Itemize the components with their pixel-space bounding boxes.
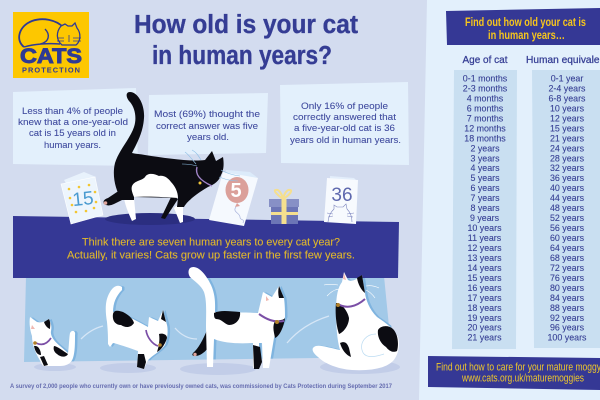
text block: only 16%: years old in human years. (290, 135, 401, 146)
heading banner: find out: in human years… (488, 29, 565, 42)
heading banner: find out (446, 8, 600, 45)
column: human equivalent: 28 years (550, 153, 585, 163)
card: 36 (324, 176, 358, 224)
column: human equivalent: 96 years (550, 323, 585, 333)
column: age of cat: 7 months (467, 113, 504, 123)
column: human equivalent: 24 years (550, 143, 585, 153)
column: human equivalent (526, 55, 600, 348)
column: human equivalent: 6-8 years (548, 93, 586, 103)
column: human equivalent: 56 years (550, 223, 585, 233)
column: human equivalent: 52 years (550, 213, 585, 223)
column: age of cat (452, 55, 517, 349)
text block: most 69%: years old. (187, 132, 229, 143)
column: age of cat: 10 years (467, 223, 502, 233)
column: age of cat: 16 years (467, 283, 502, 293)
kitten (30, 317, 78, 371)
logo: Cats Protection: PROTECTION (22, 66, 80, 74)
column: human equivalent: 10 years (550, 103, 585, 113)
column: age of cat: 13 years (467, 253, 502, 263)
text block: most 69%: Most (69%) thought the (154, 109, 260, 120)
column: human equivalent: 21 years (550, 133, 585, 143)
column: human equivalent: 32 years (550, 163, 585, 173)
text block: less than 4%: cat is 15 years old in (29, 128, 116, 139)
column: age of cat: 15 years (467, 273, 502, 283)
text block: most 69%: correct answer was five (156, 121, 258, 132)
column: age of cat: 3 years (470, 153, 500, 163)
panel: age table (419, 0, 600, 400)
column: age of cat: 5 years (470, 173, 500, 183)
column: age of cat: 7 years (470, 193, 500, 203)
text block: most 69% (148, 93, 268, 155)
column: age of cat: 17 years (467, 293, 502, 303)
mature cat sitting (313, 272, 401, 374)
column: age of cat: 0-1 months (463, 74, 508, 84)
banner: seven human years (13, 213, 399, 278)
black cat illustration (104, 92, 240, 223)
card: 5 with balloon: 5 (230, 180, 242, 202)
column: age of cat: 2-3 months (463, 84, 508, 94)
footnote: A survey of 2,000 people who currently own or have previously owned cats, was commissioned by Cats Protection during September 2017 (10, 383, 393, 390)
column: age of cat: 11 years (468, 233, 502, 243)
blue panel behind walking cats (24, 276, 392, 362)
adult cat standing (180, 267, 288, 375)
title: in human years? (152, 42, 332, 70)
text block: less than 4%: knew that a one-year-old (18, 117, 128, 128)
column: human equivalent: 72 years (550, 263, 585, 273)
column: age of cat: 6 months (467, 103, 504, 113)
card: 36: 36 (331, 185, 353, 206)
column: age of cat: Age of cat (462, 55, 508, 66)
column: age of cat: 6 years (470, 183, 500, 193)
banner: seven human years: Actually, it varies! Cats grow up faster in the first few years. (67, 250, 355, 262)
column: age of cat: 20 years (467, 323, 502, 333)
column: human equivalent: 0-1 year (551, 74, 583, 84)
young cat (100, 286, 170, 373)
curved motion lines (81, 316, 329, 343)
column: human equivalent: 2-4 years (548, 84, 586, 94)
column: human equivalent: 12 years (550, 113, 585, 123)
text block: only 16% (280, 82, 409, 165)
banner: seven human years: Think there are seven human years to every cat year? (82, 236, 340, 248)
column: human equivalent: 68 years (550, 253, 585, 263)
column: human equivalent: 48 years (550, 203, 585, 213)
column: age of cat: 19 years (467, 313, 502, 323)
column: human equivalent: 15 years (550, 123, 585, 133)
column: age of cat: 2 years (470, 143, 500, 153)
title (134, 11, 358, 70)
column: human equivalent: 36 years (550, 173, 585, 183)
column: age of cat: 9 years (470, 213, 500, 223)
column: age of cat: 18 years (467, 303, 502, 313)
column: age of cat: 4 months (467, 93, 504, 103)
column: human equivalent: 80 years (550, 283, 585, 293)
title: How old is your cat (134, 11, 358, 39)
logo: Cats Protection (13, 12, 89, 78)
text block: less than 4%: Less than 4% of people (22, 106, 123, 117)
column: age of cat: 4 years (470, 163, 500, 173)
column: human equivalent: 40 years (550, 183, 585, 193)
column: human equivalent: 60 years (550, 233, 585, 243)
logo: Cats Protection: CATS (20, 44, 82, 68)
column: human equivalent: 88 years (550, 303, 585, 313)
column: age of cat: 8 years (470, 203, 500, 213)
column: human equivalent: 64 years (550, 243, 585, 253)
column: human equivalent: 76 years (550, 273, 585, 283)
text block: only 16%: a five-year-old cat is 36 (294, 123, 395, 134)
card: 15: 15 (71, 188, 95, 211)
column: human equivalent: 92 years (550, 313, 585, 323)
text block: only 16%: correctly answered that (293, 112, 396, 123)
text block: only 16%: Only 16% of people (301, 101, 388, 112)
icon: gift box (269, 190, 299, 224)
column: age of cat: 12 months (464, 123, 506, 133)
column: human equivalent: 84 years (550, 293, 585, 303)
card: 15 (61, 172, 103, 224)
column: human equivalent: 100 years (548, 333, 587, 343)
column: age of cat: 21 years (467, 333, 502, 343)
card: 5 with balloon (209, 170, 258, 226)
column: age of cat: 12 years (467, 243, 502, 253)
text block: less than 4%: human years. (44, 140, 101, 151)
text block: less than 4% (13, 88, 138, 166)
banner: mature moggies link (428, 356, 600, 390)
column: age of cat: 18 months (464, 133, 506, 143)
column: human equivalent: 44 years (550, 193, 585, 203)
column: age of cat: 14 years (467, 263, 502, 273)
